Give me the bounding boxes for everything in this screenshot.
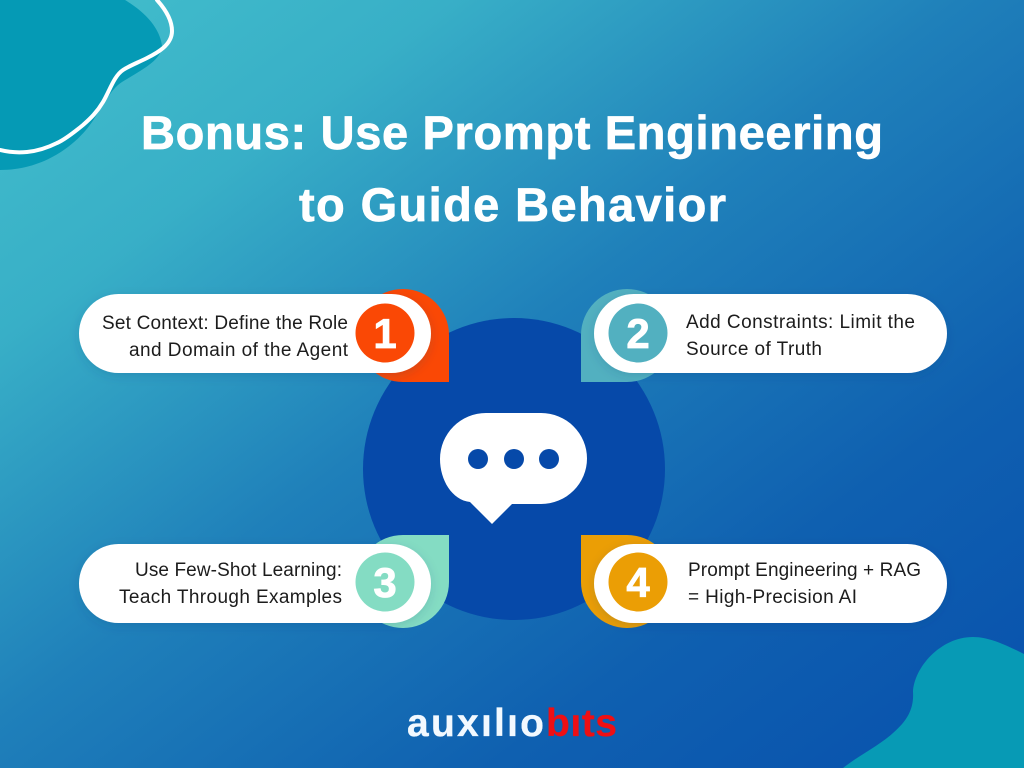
badge: number 1: 1 <box>373 310 397 357</box>
text: step 2: Add Constraints: Limit the <box>686 312 915 333</box>
text: step 2 <box>686 312 915 360</box>
panel: step 2 add constraints <box>581 289 947 382</box>
tab: step 4 <box>581 535 674 628</box>
logo: auxiliobits: auxılıo <box>407 702 544 745</box>
badge: number 3: 3 <box>373 559 397 606</box>
badge: number 4 <box>608 552 668 612</box>
badge: number 3 <box>356 552 414 612</box>
tab: step 1 <box>356 289 449 382</box>
pill: step 2 <box>594 294 947 373</box>
icon: speech bubble <box>440 413 587 524</box>
tab: step 3 <box>356 535 449 628</box>
tab: step 2 <box>581 289 674 382</box>
panel: step 1 set context <box>79 289 449 382</box>
text: step 3: Teach Through Examples <box>119 587 342 608</box>
logo: auxiliobits <box>407 702 617 745</box>
logo: auxiliobits: bıts <box>546 702 617 745</box>
badge: number 2: 2 <box>626 310 650 357</box>
badge: number 1 <box>356 304 414 362</box>
panel: step 4 prompt engineering plus RAG <box>581 535 947 628</box>
text: step 4 <box>688 560 921 608</box>
decorative blob: top left <box>0 0 172 170</box>
text: step 3: Use Few-Shot Learning: <box>135 560 342 581</box>
badge: number 4: 4 <box>626 559 650 606</box>
pill: step 3 <box>79 544 431 623</box>
text: step 4: = High-Precision AI <box>688 587 857 608</box>
badge: number 2 <box>608 304 668 362</box>
text: step 3 <box>119 560 342 608</box>
text: step 2: Source of Truth <box>686 339 822 360</box>
text: step 1: and Domain of the Agent <box>129 340 349 361</box>
title: to Guide Behavior <box>299 178 726 231</box>
title <box>141 106 883 231</box>
pill: step 1 <box>79 294 431 373</box>
text: step 1: Set Context: Define the Role <box>102 313 348 334</box>
pill: step 4 <box>594 544 947 623</box>
title: Bonus: Use Prompt Engineering <box>141 106 883 159</box>
text: step 1 <box>102 313 349 361</box>
text: step 4: Prompt Engineering + RAG <box>688 560 921 581</box>
central circle <box>363 318 665 620</box>
panel: step 3 few-shot learning <box>79 535 449 628</box>
decorative blob: bottom right <box>843 637 1024 768</box>
